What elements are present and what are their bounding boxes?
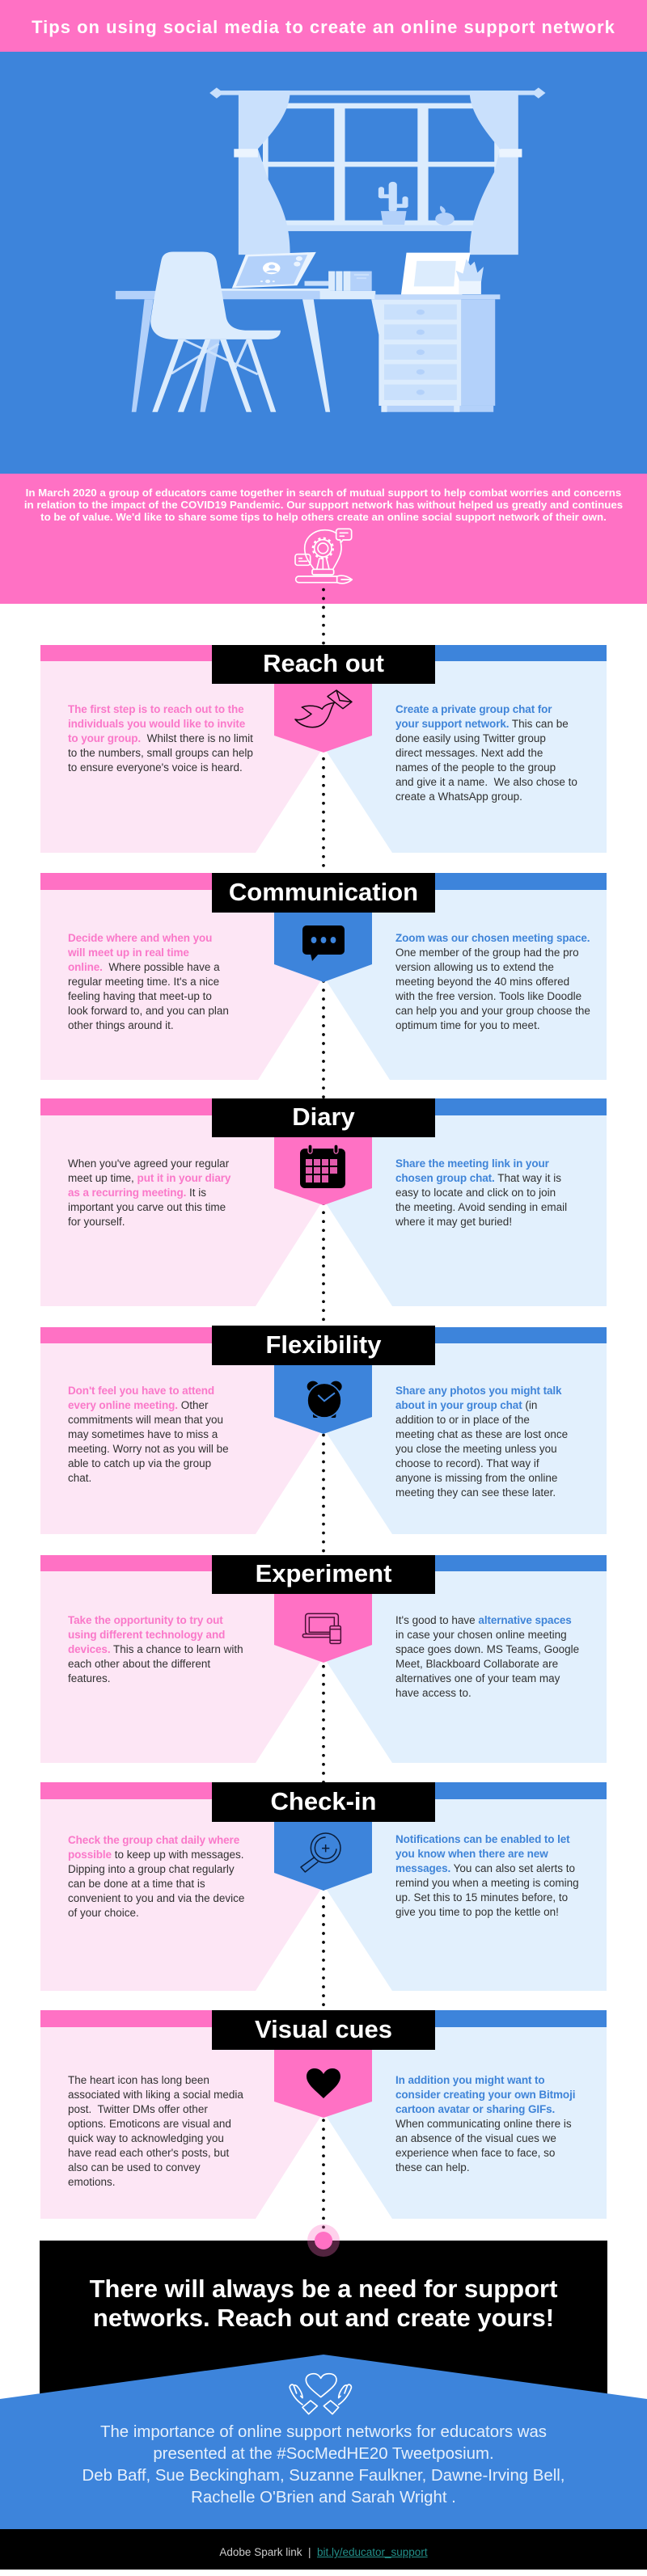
text: left tip: using different technology and xyxy=(68,1629,225,1641)
intro band xyxy=(0,474,647,604)
text: right tip: experience when face to face, so xyxy=(395,2147,555,2159)
text: right tip: Create a private group chat for xyxy=(395,703,552,715)
text: left tip: individuals you would like to invite xyxy=(68,718,245,730)
hero illustration: home office desk by window xyxy=(0,52,647,474)
text: left tip: Take the opportunity to try out xyxy=(68,1614,223,1626)
panel: Check-in xyxy=(40,1782,607,1991)
text: left tip: to the numbers, small groups can help xyxy=(68,747,253,759)
text: left tip: Don't feel you have to attend xyxy=(68,1385,214,1397)
panel: Communication xyxy=(40,873,607,1080)
panel: Visual cues xyxy=(40,2010,607,2219)
closing headline: networks. Reach out and create yours! xyxy=(93,2304,554,2332)
intro paragraph: In March 2020 a group of educators came together in search of mutual support to help combat worries and concerns xyxy=(26,487,621,499)
text: left tip: Dipping into a group chat regularly xyxy=(68,1863,235,1875)
text: right tip: chosen group chat. That way it is xyxy=(395,1172,561,1184)
text: left tip: have read each other's posts, but xyxy=(68,2147,229,2159)
text: right tip xyxy=(395,2074,575,2173)
heading: Visual cues: Visual cues xyxy=(255,2015,392,2043)
title banner xyxy=(0,0,647,52)
text: left tip: every online meeting. Other xyxy=(68,1399,208,1411)
text: right tip: done easily using Twitter group xyxy=(395,732,546,744)
text: left tip: The first step is to reach out to the xyxy=(68,703,244,715)
footer bar: Adobe Spark link | bit.ly/educator_support xyxy=(219,2546,428,2558)
text: left tip: able to catch up via the group xyxy=(68,1457,211,1469)
text: left tip xyxy=(68,932,229,1031)
closing headline: There will always be a need for support xyxy=(90,2275,557,2303)
text: right tip: One member of the group had the pro xyxy=(395,947,579,959)
text: right tip: an absence of the visual cues we xyxy=(395,2132,556,2144)
text: left tip: meet up time, put it in your diary xyxy=(68,1172,230,1184)
text: left tip: also can be used to convey xyxy=(68,2161,201,2173)
credits text: presented at the #SocMedHE20 Tweetposium. xyxy=(153,2445,494,2463)
text: right tip: consider creating your own Bitmoji xyxy=(395,2089,575,2101)
text: right tip: Share any photos you might talk xyxy=(395,1385,561,1397)
text: right tip: version allowing us to extend the xyxy=(395,961,554,973)
text: right tip: When communicating online there is xyxy=(395,2118,572,2130)
text: right tip: Share the meeting link in your xyxy=(395,1157,549,1170)
blue credits panel shape xyxy=(0,2355,647,2529)
credits text: Deb Baff, Sue Beckingham, Suzanne Faulkner, Dawne-Irving Bell, xyxy=(82,2467,565,2485)
icon: laptop and phone xyxy=(302,1613,341,1644)
text: right tip: alternatives one of your team may xyxy=(395,1672,560,1684)
text: right tip: direct messages. Next add the xyxy=(395,747,543,759)
text: right tip: It's good to have alternative spaces xyxy=(395,1614,572,1626)
text: left tip: Decide where and when you xyxy=(68,932,212,944)
text: left tip: feeling having that meet-up to xyxy=(68,990,212,1002)
text: right tip: with the free version. Tools like Doodle xyxy=(395,990,581,1002)
icon: hands holding heart xyxy=(289,2373,353,2415)
text: left tip: to ensure everyone's voice is heard. xyxy=(68,761,243,774)
text: right tip: In addition you might want to xyxy=(395,2074,545,2086)
text: left tip: look forward to, and you can plan xyxy=(68,1005,229,1017)
text: right tip: addition to or in place of the xyxy=(395,1414,530,1426)
text: right tip: the meeting. Avoid sending in email xyxy=(395,1201,567,1213)
text: left tip: devices. This a chance to learn with xyxy=(68,1643,243,1655)
text: right tip: your support network. This can be xyxy=(395,718,569,730)
text: right tip: Notifications can be enabled to let xyxy=(395,1833,570,1845)
text: left tip: The heart icon has long been xyxy=(68,2074,209,2086)
dotted connector line xyxy=(322,588,325,2229)
text: right tip: cartoon avatar or sharing GIFs. xyxy=(395,2103,555,2115)
closing black panel xyxy=(40,2241,607,2402)
text: right tip xyxy=(395,703,577,803)
text: right tip: about in your group chat (in xyxy=(395,1399,537,1411)
text: left tip: regular meeting time. It's a nice xyxy=(68,976,219,988)
heading: Flexibility: Flexibility xyxy=(265,1330,381,1359)
heading: Check-in: Check-in xyxy=(271,1787,376,1815)
text: left tip: important you carve out this time xyxy=(68,1201,226,1213)
text: left tip: emotions. xyxy=(68,2176,116,2188)
text: left tip: When you've agreed your regular xyxy=(68,1157,229,1170)
text: right tip: have access to. xyxy=(395,1687,472,1699)
text: left tip: to your group. Whilst there is no limit xyxy=(68,732,253,744)
text: right tip: anyone is missing from the online xyxy=(395,1472,557,1484)
credits text: Rachelle O'Brien and Sarah Wright . xyxy=(191,2489,456,2506)
text: right tip: and give it a name. We also chose to xyxy=(395,776,577,788)
closing headline xyxy=(89,2275,558,2332)
text: right tip: names of the people to the group xyxy=(395,761,556,774)
title banner: Tips on using social media to create an online support network xyxy=(32,17,615,37)
icon: heart xyxy=(307,2068,340,2098)
text: left tip: of your choice. xyxy=(68,1907,139,1919)
text: right tip: easy to locate and click on to join xyxy=(395,1187,556,1199)
text: left tip: possible to keep up with messages. xyxy=(68,1849,244,1861)
text: right tip xyxy=(395,932,590,1031)
text: right tip: optimum time for you to meet. xyxy=(395,1019,540,1031)
text: left tip: will meet up in real time xyxy=(68,947,189,959)
text: right tip: create a WhatsApp group. xyxy=(395,791,522,803)
text: left tip: features. xyxy=(68,1672,111,1684)
text: left tip: meeting. Worry not as you will be xyxy=(68,1443,229,1455)
intro paragraph: in relation to the impact of the COVID19 Pandemic. Our support network has without helped us greatly and continues xyxy=(24,499,623,511)
text: left tip xyxy=(68,1834,244,1919)
text: right tip xyxy=(395,1833,579,1918)
text: right tip: in case your chosen online meeting xyxy=(395,1629,567,1641)
text: right tip: meeting beyond the 40 mins offered xyxy=(395,976,569,988)
footer bar xyxy=(0,2529,647,2570)
intro paragraph: to be of value. We'd like to share some tips to help others create an online social support network of their own. xyxy=(40,511,607,523)
text: right tip: meeting they can see these later. xyxy=(395,1486,556,1499)
heading: Communication: Communication xyxy=(229,878,418,906)
icon: lightbulb with gear and chat bubbles xyxy=(294,529,353,584)
icon: alarm clock xyxy=(307,1381,342,1418)
text: left tip: commitments will mean that you xyxy=(68,1414,223,1426)
panel: Diary xyxy=(40,1098,607,1306)
text: right tip: up. Set this to 15 minutes before, to xyxy=(395,1891,568,1904)
text: left tip: as a recurring meeting. It is xyxy=(68,1187,206,1199)
credits text: The importance of online support networks for educators was xyxy=(100,2423,547,2441)
text: left tip: other things around it. xyxy=(68,1019,174,1031)
credits text xyxy=(82,2423,565,2506)
text: left tip: may sometimes have to miss a xyxy=(68,1428,218,1440)
text: right tip: remind you when a meeting is coming xyxy=(395,1877,579,1889)
text: right tip: Meet, Blackboard Collaborate are xyxy=(395,1658,558,1670)
icon: speech bubble xyxy=(302,925,345,961)
panel: Flexibility xyxy=(40,1326,607,1534)
text: left tip xyxy=(68,1385,229,1484)
panel: Reach out xyxy=(40,645,607,853)
text: right tip xyxy=(395,1614,579,1699)
heading: Reach out: Reach out xyxy=(263,649,384,677)
text: left tip: online. Where possible have a xyxy=(68,961,220,973)
text: right tip xyxy=(395,1157,567,1228)
heading: Experiment: Experiment xyxy=(256,1559,391,1587)
text: right tip: you know when there are new xyxy=(395,1848,548,1860)
text: left tip: each other about the different xyxy=(68,1658,210,1670)
text: right tip: meeting chat as these are lost once xyxy=(395,1428,568,1440)
text: left tip: quick way to acknowledging you xyxy=(68,2132,224,2144)
icon: calendar xyxy=(300,1145,345,1188)
text: left tip xyxy=(68,1157,231,1228)
text: left tip xyxy=(68,1614,243,1684)
panel: Experiment xyxy=(40,1555,607,1763)
text: left tip: can be done at a time that is xyxy=(68,1878,205,1890)
text: left tip: convenient to you and via the device xyxy=(68,1892,244,1904)
text: right tip: you close the meeting unless you xyxy=(395,1443,557,1455)
text: right tip: space goes down. MS Teams, Google xyxy=(395,1643,579,1655)
text: right tip: these can help. xyxy=(395,2161,470,2173)
intro paragraph xyxy=(24,487,623,523)
text: right tip: messages. You can also set alerts to xyxy=(395,1862,575,1874)
text: right tip: give you time to pop the kettle on! xyxy=(395,1906,559,1918)
text: right tip xyxy=(395,1385,568,1499)
icon: magnifying glass xyxy=(300,1832,341,1873)
text: left tip: chat. xyxy=(68,1472,91,1484)
icon: bird carrying envelope xyxy=(294,689,353,727)
text: right tip: where it may get buried! xyxy=(395,1216,512,1228)
text: right tip: Zoom was our chosen meeting space. xyxy=(395,932,590,944)
text: left tip: associated with liking a social media xyxy=(68,2089,243,2101)
text: left tip: for yourself. xyxy=(68,1216,125,1228)
text: right tip: choose to record). That way if xyxy=(395,1457,539,1469)
text: right tip: can help you and your group choose the xyxy=(395,1005,590,1017)
text: left tip xyxy=(68,2074,243,2188)
end marker: pink circle xyxy=(307,2224,340,2257)
text: left tip: options. Emoticons are visual and xyxy=(68,2118,231,2130)
text: left tip: post. Twitter DMs offer other xyxy=(68,2103,208,2115)
text: left tip: Check the group chat daily where xyxy=(68,1834,239,1846)
heading: Diary: Diary xyxy=(292,1102,355,1131)
text: left tip xyxy=(68,703,253,774)
